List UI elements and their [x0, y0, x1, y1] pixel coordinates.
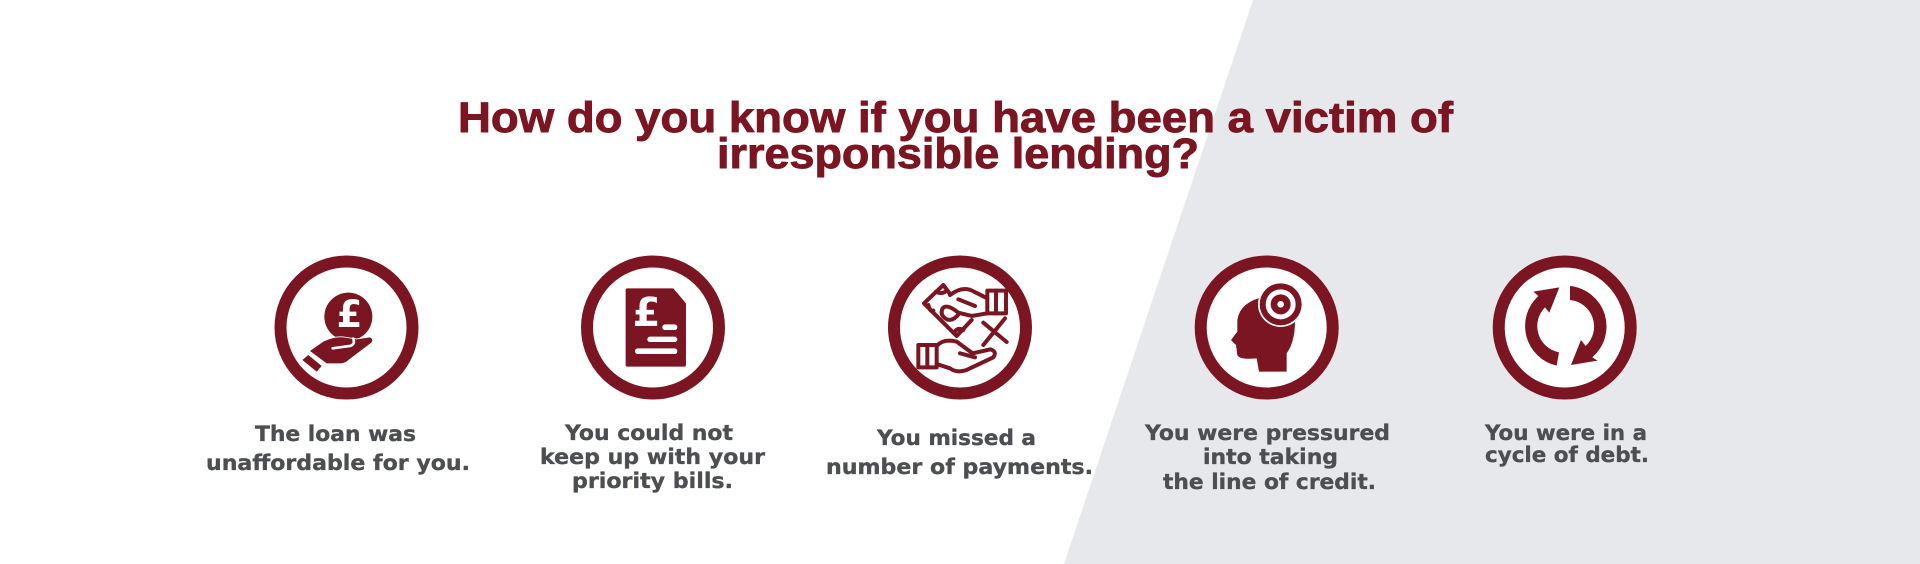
title: How do you know if you have been a victim of — [458, 94, 1454, 142]
label: cycle of debt: You were in a — [1484, 421, 1647, 446]
icon: head with target — [1201, 262, 1333, 394]
label: cycle of debt: cycle of debt. — [1485, 443, 1649, 468]
label: the loan was unaffordable — [206, 422, 470, 476]
item: unaffordable loan — [206, 262, 470, 476]
icon: hand holding pound coin — [280, 262, 412, 394]
label: cycle of debt — [1484, 421, 1649, 468]
label: pressured into taking credit: You were pressured — [1144, 421, 1390, 446]
label: missed payments: You missed a — [876, 426, 1036, 451]
label: pressured into taking credit: the line of credit. — [1163, 470, 1376, 495]
label: the loan was unaffordable: unaffordable for you. — [206, 451, 470, 476]
label: the loan was unaffordable: The loan was — [255, 422, 416, 447]
icon: pound document — [587, 262, 719, 394]
icon: hands exchanging money with cross — [894, 262, 1026, 394]
icon: pound document: £ — [633, 290, 660, 336]
title: irresponsible lending? — [717, 130, 1199, 178]
label: could not keep up with bills: keep up with your — [540, 445, 765, 470]
label: pressured into taking credit: into taking — [1203, 445, 1338, 470]
label: could not keep up with bills — [540, 421, 765, 494]
item: priority bills — [540, 262, 765, 494]
icon: circular arrows — [1499, 262, 1631, 394]
background: grey diagonal panel — [1064, 0, 1920, 564]
item: cycle of debt — [1484, 262, 1649, 468]
title — [458, 94, 1454, 178]
label: missed payments: number of payments. — [826, 455, 1093, 480]
label: could not keep up with bills: priority bills. — [572, 469, 733, 494]
item: missed payments — [826, 262, 1093, 480]
item: pressured into credit — [1144, 262, 1390, 495]
label: pressured into taking credit — [1144, 421, 1390, 495]
label: could not keep up with bills: You could not — [564, 421, 733, 446]
icon: hand holding pound coin: £ — [337, 293, 362, 336]
label: missed payments — [826, 426, 1093, 480]
